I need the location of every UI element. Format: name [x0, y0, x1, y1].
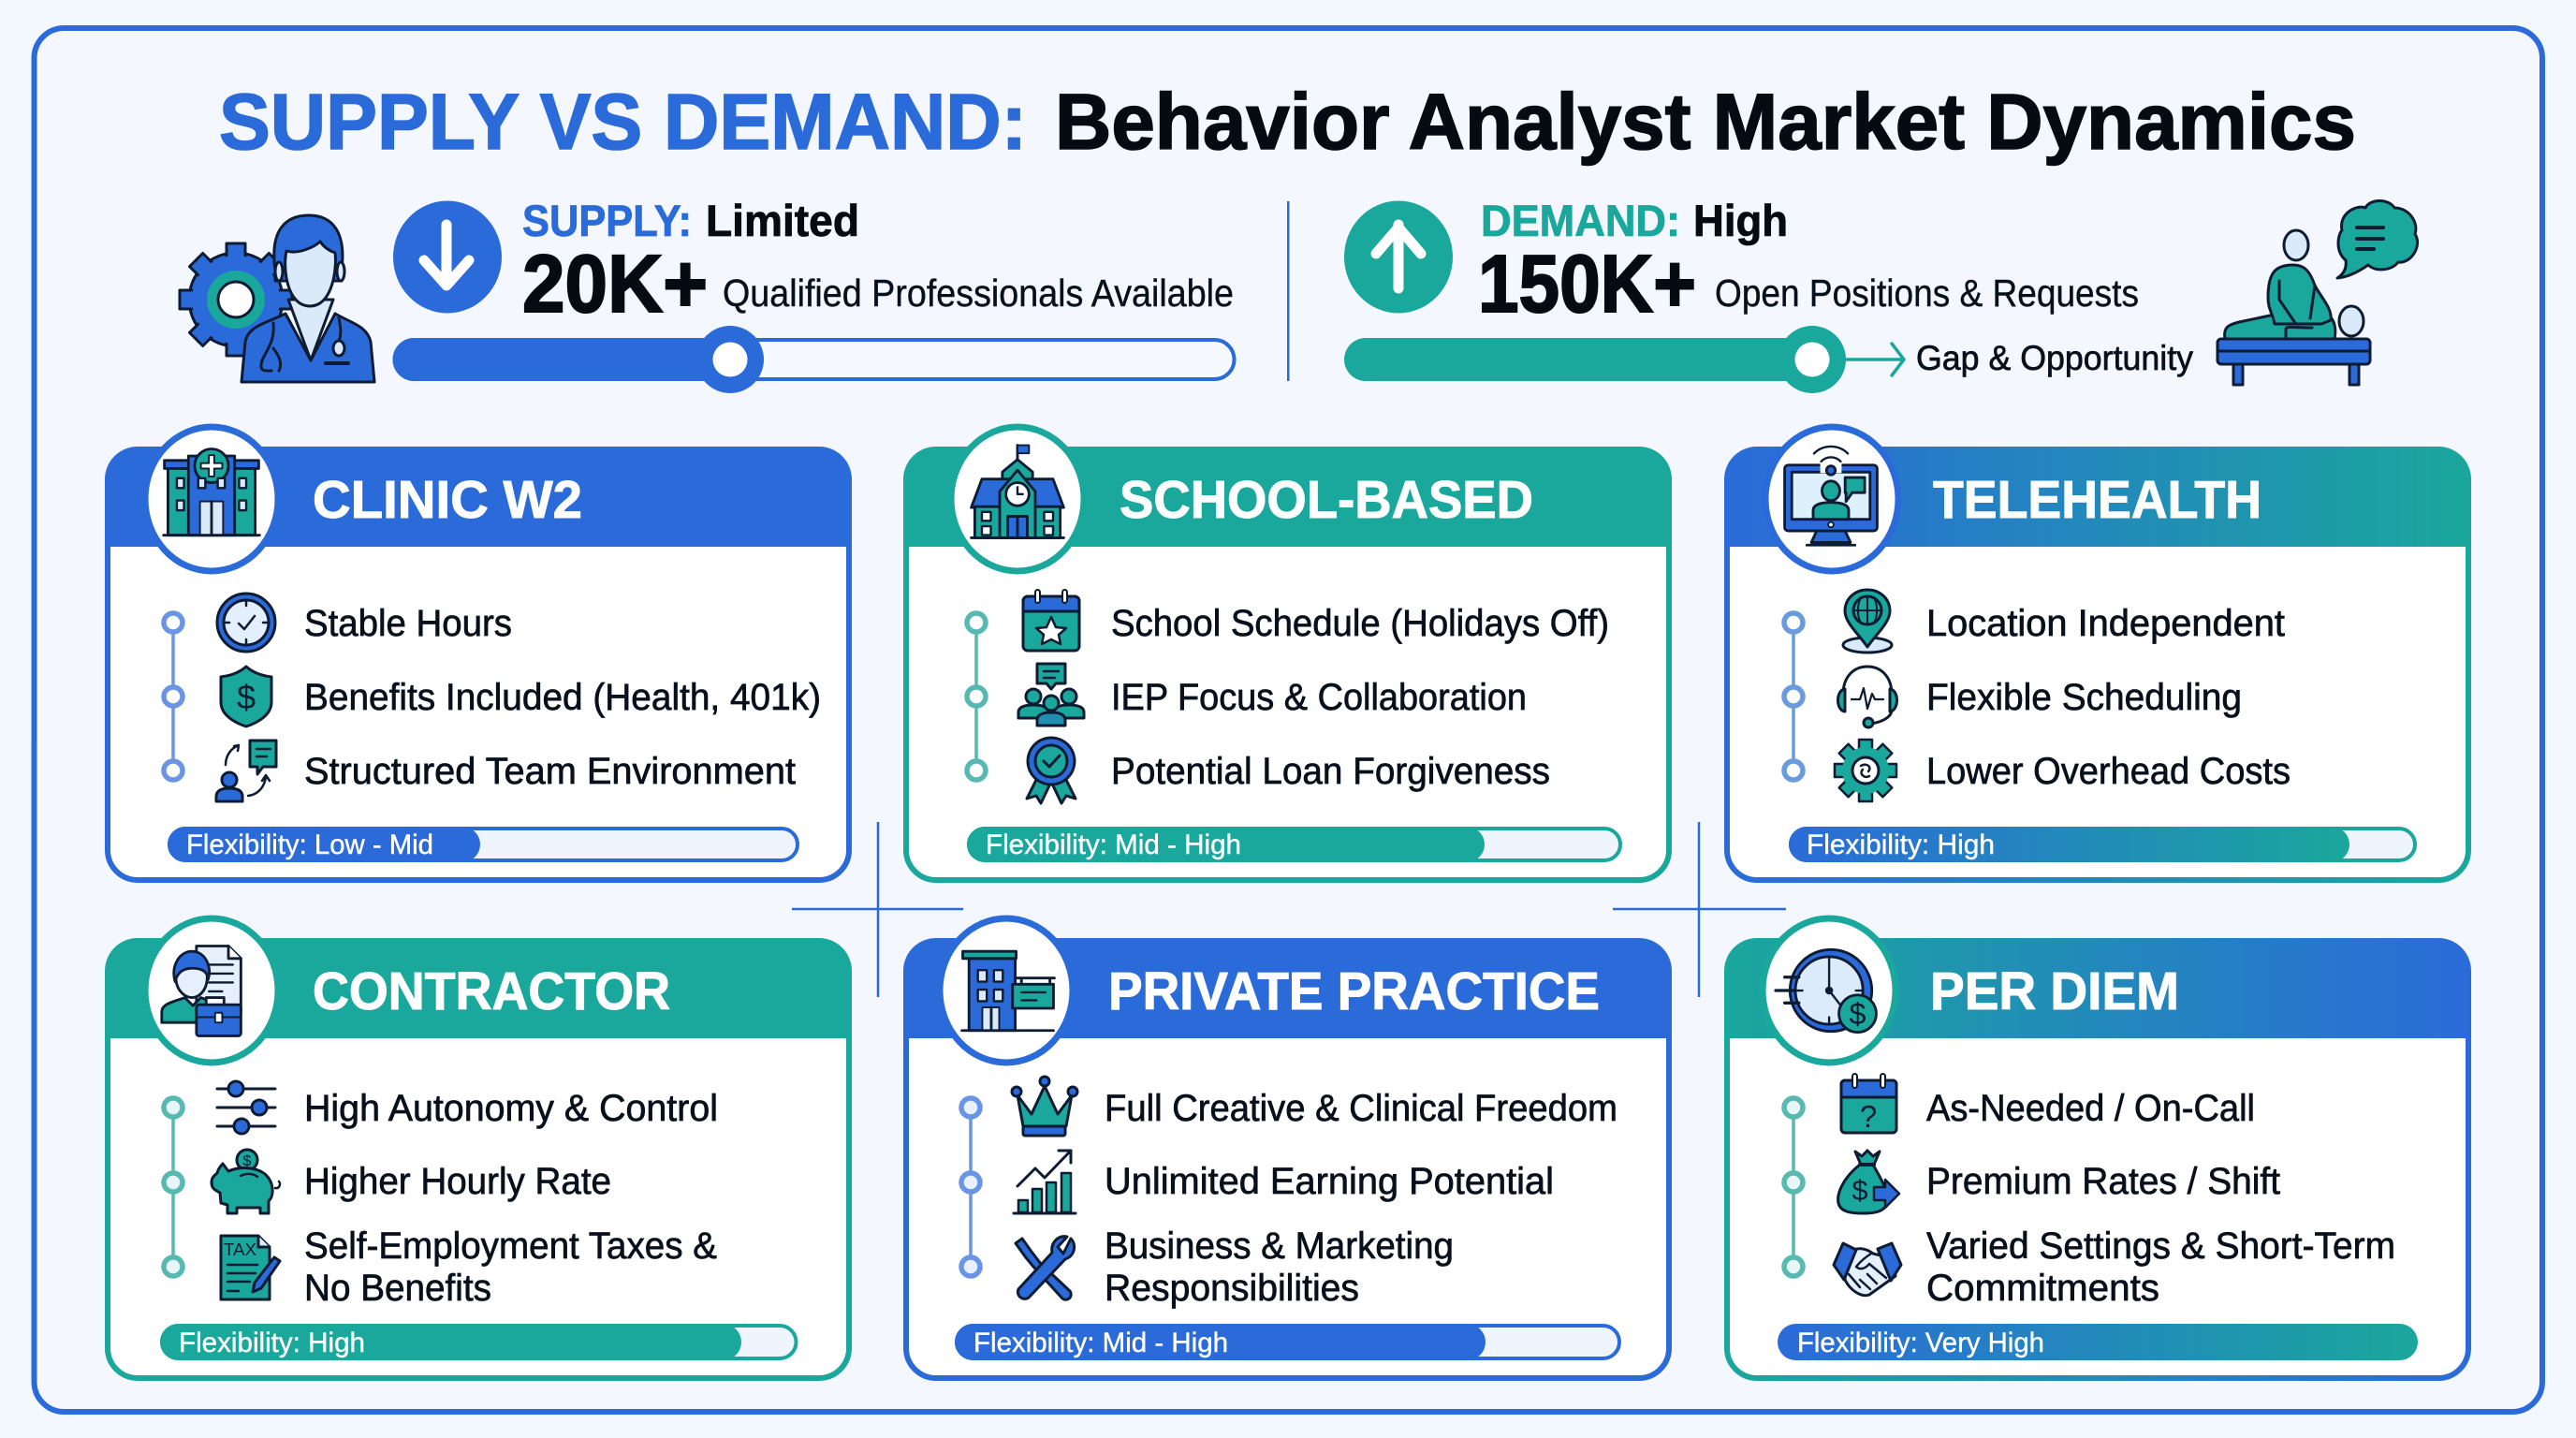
icon: calendar question: ? — [1860, 1099, 1877, 1134]
icon: sliders — [217, 1081, 275, 1134]
panel: telehealth — [1724, 427, 2471, 880]
item text: Lower Overhead Costs — [1926, 751, 2291, 792]
icon: tax form: TAX — [224, 1240, 256, 1259]
card header — [105, 938, 852, 1038]
supply heading — [522, 196, 859, 245]
list connector — [961, 1098, 980, 1276]
card header — [903, 447, 1672, 547]
card header — [903, 938, 1672, 1038]
item text: Flexible Scheduling — [1926, 677, 2242, 718]
icon badge: contractor — [145, 918, 278, 1063]
flexibility bar: Flexibility: Very High — [1797, 1328, 2044, 1358]
item text: No Benefits — [304, 1268, 491, 1309]
card body — [906, 960, 1669, 1378]
heading: CONTRACTOR — [313, 961, 670, 1021]
icon: dollar shield: $ — [237, 678, 256, 716]
icon: down arrow circle — [393, 200, 502, 313]
icon: money bag: $ — [1852, 1174, 1868, 1207]
icon badge: clock money: $ — [1850, 997, 1866, 1031]
list connector — [967, 613, 986, 780]
item text: Stable Hours — [304, 603, 512, 644]
item text: Self-Employment Taxes & — [304, 1225, 717, 1267]
item text: Location Independent — [1926, 603, 2285, 644]
list connector — [1784, 1098, 1803, 1276]
supply heading: SUPPLY: — [522, 196, 692, 245]
icon: doctor with gear — [180, 215, 374, 382]
icon: location globe — [1843, 590, 1892, 653]
item text — [304, 1225, 717, 1309]
item text: Benefits Included (Health, 401k) — [304, 677, 821, 718]
item text: School Schedule (Holidays Off) — [1111, 603, 1609, 644]
item text: Business & Marketing — [1105, 1225, 1454, 1267]
demand stat: Open Positions & Requests — [1715, 271, 2139, 315]
icon: headset — [1838, 667, 1896, 727]
item text: Varied Settings & Short-Term — [1926, 1225, 2395, 1267]
icon: growth chart — [1014, 1151, 1076, 1213]
supply stat: Qualified Professionals Available — [723, 271, 1234, 315]
icon: ribbon badge — [1027, 738, 1076, 803]
title: SUPPLY VS DEMAND: — [219, 78, 1027, 166]
panel: school-based — [903, 427, 1672, 880]
panel: contractor — [105, 918, 852, 1378]
center divider — [1287, 201, 1290, 381]
icon badge: practice building — [940, 918, 1073, 1063]
icon badge: hospital — [145, 427, 278, 571]
item text: Full Creative & Clinical Freedom — [1105, 1088, 1617, 1129]
flexibility bar — [1778, 1324, 2418, 1360]
flexibility bar — [967, 827, 1620, 862]
card body — [1727, 468, 2468, 880]
gap label: Gap & Opportunity — [1916, 339, 2193, 377]
heading: TELEHEALTH — [1933, 470, 2261, 530]
demand heading: DEMAND: — [1481, 196, 1680, 245]
item text: High Autonomy & Control — [304, 1088, 718, 1129]
icon: therapist and patient — [2217, 200, 2418, 385]
item text: As-Needed / On-Call — [1926, 1088, 2255, 1129]
card header — [105, 447, 852, 547]
icon: up arrow circle — [1344, 200, 1453, 313]
card body — [108, 468, 849, 880]
item text: Commitments — [1926, 1268, 2159, 1309]
crosshair decoration right — [1613, 822, 1786, 997]
panel: supply — [180, 196, 1234, 393]
icon: tax form — [221, 1236, 280, 1299]
demand heading — [1481, 196, 1788, 245]
supply stat — [522, 239, 1234, 330]
flexibility bar: Flexibility: Mid - High — [973, 1328, 1228, 1358]
title: Behavior Analyst Market Dynamics — [1055, 78, 2356, 166]
icon: money bag — [1838, 1151, 1899, 1213]
panel: per diem — [1724, 918, 2471, 1378]
card header — [1724, 938, 2471, 1038]
icon: team arrows — [216, 741, 276, 801]
item text: Unlimited Earning Potential — [1105, 1161, 1554, 1202]
title — [219, 78, 2356, 166]
icon: crown — [1012, 1077, 1077, 1136]
flexibility bar: Flexibility: High — [1807, 829, 1995, 860]
item text: IEP Focus & Collaboration — [1111, 677, 1527, 718]
flexibility bar — [160, 1324, 796, 1360]
icon: calendar star — [1023, 590, 1079, 651]
item text: Potential Loan Forgiveness — [1111, 751, 1550, 792]
list connector — [1784, 613, 1803, 780]
flexibility bar: Flexibility: Mid - High — [986, 829, 1241, 860]
supply slider — [393, 326, 1234, 393]
icon: clock check — [217, 594, 275, 652]
item text: Higher Hourly Rate — [304, 1161, 611, 1202]
panel: demand — [1344, 196, 2418, 393]
item text: Structured Team Environment — [304, 751, 796, 792]
item text: Premium Rates / Shift — [1926, 1161, 2280, 1202]
item text — [1926, 1225, 2395, 1309]
flexibility bar: Flexibility: High — [179, 1328, 365, 1358]
crosshair decoration left — [792, 822, 963, 997]
card body — [906, 468, 1669, 880]
list connector — [164, 613, 183, 780]
supply stat: 20K+ — [522, 239, 708, 330]
heading: CLINIC W2 — [313, 470, 582, 530]
item text — [1105, 1225, 1454, 1309]
icon badge: monitor — [1765, 427, 1898, 571]
demand stat: 150K+ — [1478, 239, 1696, 330]
list connector — [164, 1098, 183, 1276]
icon: dollar shield — [221, 667, 271, 726]
flexibility bar — [955, 1324, 1619, 1360]
heading: SCHOOL-BASED — [1120, 470, 1533, 530]
arrow: gap — [1843, 344, 1904, 375]
card header — [1724, 447, 2471, 547]
card body — [1727, 960, 2468, 1378]
flexibility bar — [168, 827, 798, 862]
demand stat — [1478, 239, 2139, 330]
demand slider — [1344, 326, 1846, 393]
icon: wrench and screwdriver — [1016, 1237, 1075, 1299]
panel: private practice — [903, 918, 1672, 1378]
icon: people collaborating — [1018, 664, 1084, 726]
flexibility bar — [1789, 827, 2415, 862]
icon: handshake — [1834, 1243, 1901, 1296]
icon badge: clock money — [1763, 918, 1895, 1063]
flexibility bar: Flexibility: Low - Mid — [186, 829, 433, 860]
icon: calendar question — [1841, 1074, 1896, 1134]
supply heading: Limited — [706, 196, 859, 245]
icon badge: school — [951, 427, 1084, 571]
heading: PRIVATE PRACTICE — [1108, 961, 1600, 1021]
heading: PER DIEM — [1930, 961, 2179, 1021]
icon: piggy bank — [212, 1150, 280, 1213]
icon: piggy bank: $ — [243, 1153, 252, 1169]
icon: cost gear — [1835, 740, 1896, 801]
item text: Responsibilities — [1105, 1268, 1359, 1309]
demand heading: High — [1693, 196, 1788, 245]
card body — [108, 960, 849, 1378]
panel: clinic w2 — [105, 427, 852, 880]
